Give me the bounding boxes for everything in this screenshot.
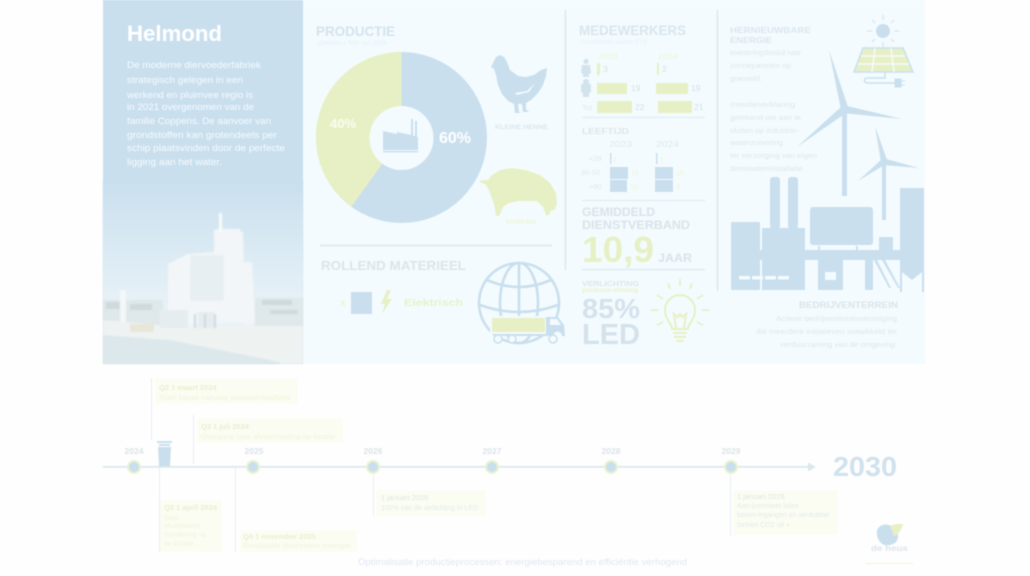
- icon: factory buildings: [731, 177, 924, 292]
- chart: leeftijd: <29: [589, 154, 602, 163]
- label: chicken: KLEINE HENNE: [495, 124, 549, 131]
- chart: medewerkers per jaar: 3: [603, 64, 608, 74]
- subheading: productie: (Omzet) ± 500 ton 2024: [317, 40, 387, 47]
- callout: 1 januari 2029: Aan ijzermixer laten: [737, 503, 799, 510]
- text block: intro: familie Coppens. De aanvoer van: [127, 116, 271, 127]
- chart: medewerkers per jaar: 2: [662, 64, 667, 74]
- callout: 1 maart 2024: [155, 378, 298, 404]
- text block: energie: sluiten op industrie-: [730, 126, 800, 135]
- text block: bedrijventerrein: [756, 314, 898, 349]
- text block: energie: waterzuivering: [729, 138, 783, 147]
- timeline nodes: [128, 461, 737, 473]
- heading: productie: PRODUCTIE: [316, 23, 395, 39]
- chart: leeftijd: 30-50: [581, 168, 600, 177]
- chart: leeftijd: 1: [660, 155, 664, 164]
- text block: bedrijventerrein: Actieve bedrijventerreinvereniging: [776, 314, 897, 323]
- icon: lightning: [381, 290, 392, 314]
- text block: intro: grondstoffen kan grotendeels per: [127, 130, 277, 141]
- callout: 1 maart 2024: Start bouw nieuwe procesinstallatie: [159, 395, 291, 402]
- icon: solar panel: [854, 48, 913, 87]
- text block: intro: strategisch gelegen in een: [127, 75, 243, 86]
- icon: wind turbines: [797, 50, 919, 220]
- callout: 1 november 2025: [240, 530, 357, 552]
- text block: intro: [126, 60, 285, 168]
- label: elektrisch: Elektrisch: [404, 297, 463, 309]
- pie chart: [316, 52, 487, 223]
- chart: leeftijd: [581, 139, 684, 192]
- text block: intro: schip plaatsvinden door de perfecte: [127, 143, 285, 154]
- text block: intro: ligging aan het water.: [127, 157, 222, 168]
- text block: energie: getekend om aan te: [730, 113, 801, 122]
- logo: de heus: de heus: [871, 544, 909, 553]
- callout: 1 januari 2029: tonnen CO2 uit +: [737, 522, 790, 529]
- chart: medewerkers per jaar: 21: [694, 102, 704, 112]
- callout: 1 maart 2024: Q2 1 maart 2024: [159, 383, 217, 392]
- text block: energie: Investeringsbesluit naar: [730, 48, 801, 57]
- year labels: 2028: [602, 446, 621, 456]
- panel: productie: [316, 23, 557, 226]
- callout: 1 januari 2026: 1 januari 2026: [381, 493, 429, 502]
- chart: leeftijd: >50: [589, 182, 602, 191]
- text block: bedrijventerrein: die meerdere initiatieven ontwikkeld ter: [756, 327, 898, 336]
- panel: rollend materieel: [321, 258, 565, 343]
- callout: 1 januari 2029: boven-ingangen en verdubbel: [737, 512, 829, 519]
- chart: leeftijd: 11: [631, 168, 639, 177]
- text block: intro: De moderne diervoederfabriek: [127, 60, 261, 71]
- callout: 1 april 2024: monitoring op: [164, 532, 207, 539]
- year labels: 2026: [364, 446, 383, 456]
- year labels: 2024: [125, 446, 144, 456]
- callout: 1 november 2025: Realisatie duurzame energie: [243, 543, 351, 550]
- year labels: 2029: [722, 446, 741, 456]
- chart: medewerkers per jaar: 2023: [598, 52, 618, 61]
- heading: verlichting: productie-afdeling: [582, 288, 638, 294]
- label: total: Tot.: [582, 103, 594, 112]
- heading: rollend materieel: ROLLEND MATERIEEL: [321, 258, 466, 273]
- text block: energie: zonnepanelen op: [730, 61, 791, 70]
- panel: hernieuwbare energie: [729, 15, 924, 349]
- icon: blue square: [351, 292, 372, 314]
- chart: leeftijd: 10: [630, 182, 638, 191]
- heading: bedrijventerrein: BEDRIJVENTERREIN: [799, 300, 898, 310]
- heading: hernieuwbare energie: [730, 25, 811, 45]
- year labels: 2025: [245, 446, 264, 456]
- value: 10,9 jaar: [582, 229, 693, 270]
- label: 60%: 60%: [439, 130, 471, 147]
- chart: medewerkers per jaar: [581, 52, 704, 113]
- icon: chicken: [491, 55, 547, 113]
- chart: medewerkers per jaar: 22: [635, 102, 645, 112]
- callout: 1 januari 2026: [376, 490, 486, 516]
- text block: intro: werkend en pluimvee regio is: [126, 90, 253, 101]
- photo: factory on the water: [103, 180, 303, 364]
- callout: 1 april 2024: Start: [164, 515, 179, 522]
- heading: gemiddeld dienstverband: [582, 207, 690, 232]
- year: 2030: 2030: [833, 451, 897, 482]
- main panel background: [303, 0, 925, 364]
- callout: 1 april 2024: afvalstroom: [164, 523, 200, 530]
- callout: 1 januari 2026: 100% van de verlichting in LED: [381, 505, 478, 512]
- chart: leeftijd: 1: [613, 155, 617, 164]
- callout: 1 april 2024: Q2 1 april 2024: [164, 503, 218, 512]
- text block: intro: in 2021 overgenomen van de: [127, 102, 254, 113]
- callout: 1 juli 2024: Q3 1 juli 2024: [201, 422, 250, 431]
- panel: medewerkers: [579, 23, 709, 351]
- text block: energie: Intentieverklaring: [730, 100, 795, 109]
- heading: verlichting: [582, 279, 639, 294]
- label: count: x: [340, 298, 346, 309]
- year labels: 2027: [483, 446, 502, 456]
- chart: leeftijd: 2024: [656, 139, 679, 149]
- logo: de heus: [866, 524, 913, 564]
- year labels: [125, 446, 741, 456]
- chart: leeftijd: 10: [676, 168, 684, 177]
- icon: bin: [157, 441, 172, 466]
- callout: 1 juli 2024: [197, 418, 343, 443]
- text block: bedrijventerrein: verduurzaming van de omgeving.: [780, 340, 897, 349]
- text block: energie: demiwaterinstallatie.: [730, 164, 805, 173]
- text block: energie: [729, 48, 817, 173]
- chart: leeftijd: 2023: [609, 139, 632, 149]
- heading: gemiddeld dienstverband: GEMIDDELD: [582, 207, 655, 219]
- subheading: medewerkers: Gemiddeld aantal FTE: [580, 39, 649, 46]
- callout: 1 november 2025: Q4 1 november 2025: [243, 532, 316, 541]
- callout: 1 april 2024: [160, 500, 222, 552]
- callout: 1 juli 2024: Overgang naar afvalscheiding op locatie: [201, 434, 335, 441]
- icon: globe with truck: [479, 263, 565, 343]
- chart: medewerkers per jaar: 19: [691, 83, 701, 93]
- heading: Helmond: Helmond: [127, 21, 222, 46]
- label: pig: VARKEN: [505, 219, 536, 226]
- value: 85% LED: LED: [582, 319, 640, 351]
- heading: hernieuwbare energie: HERNIEUWBARE: [730, 25, 811, 35]
- callout: 1 januari 2029: 1 januari 2029: [737, 492, 785, 501]
- footer caption: Optimalisatie productieprocessen: energiebesparend en efficiëntie verhogend: [358, 557, 687, 568]
- callout: 1 april 2024: de locatie: [164, 541, 194, 548]
- heading: leeftijd: LEEFTIJD: [582, 126, 629, 136]
- value: 85% LED: [582, 293, 640, 351]
- value: 10,9 jaar: JAAR: [658, 253, 693, 265]
- timeline: [103, 378, 913, 568]
- value: 10,9 jaar: 10,9: [582, 229, 654, 270]
- icon: woman: [581, 59, 591, 77]
- icon: pig: [479, 168, 557, 216]
- value: 85% LED: 85%: [582, 293, 640, 324]
- icon: man: [581, 79, 591, 97]
- heading: medewerkers: MEDEWERKERS: [579, 23, 686, 38]
- chart: medewerkers per jaar: 2024: [658, 52, 678, 61]
- heading: hernieuwbare energie: ENERGIE: [730, 35, 772, 45]
- timeline axis and arrow: [103, 462, 816, 472]
- icon: factory: [383, 119, 418, 152]
- icon: sun: [867, 15, 899, 47]
- label: 40%: 40%: [330, 116, 356, 131]
- heading: verlichting: VERLICHTING: [582, 279, 639, 288]
- panel: Helmond intro: [103, 0, 303, 364]
- text block: energie: grasveld.: [730, 74, 762, 83]
- callout: 1 januari 2029: [733, 490, 838, 535]
- chart: medewerkers per jaar: 19: [631, 83, 641, 93]
- icon: light bulb: [651, 279, 709, 341]
- chart: leeftijd: 9: [676, 182, 680, 191]
- text block: energie: ter verzorging van eigen: [730, 151, 817, 160]
- heading: gemiddeld dienstverband: DIENSTVERBAND: [582, 220, 690, 232]
